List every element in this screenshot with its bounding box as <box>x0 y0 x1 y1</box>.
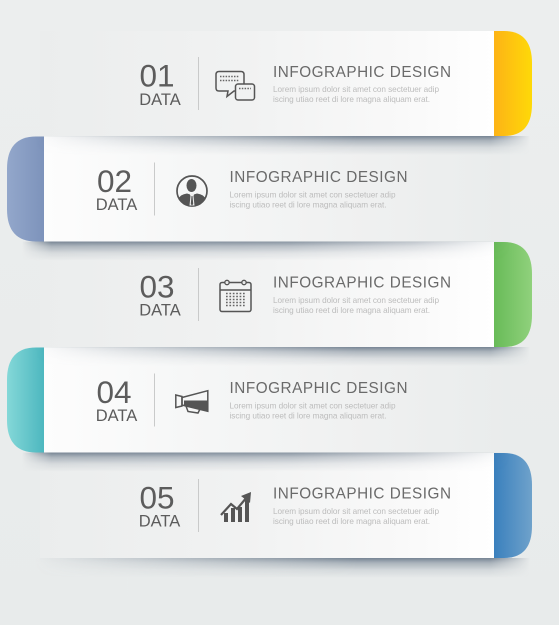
icon: speech bubbles <box>216 72 254 100</box>
icon: businessman <box>177 176 207 206</box>
text: heading and body: Lorem ipsum dolor sit amet con sectetuer adip <box>273 85 439 94</box>
number: 03: DATA <box>139 302 181 320</box>
number: 03: 03 <box>139 268 175 304</box>
number: 04 <box>96 374 137 425</box>
number: 04: DATA <box>96 407 137 425</box>
text: heading and body <box>273 486 451 526</box>
text: heading and body: iscing utiao reet di lore magna aliquam erat. <box>230 412 386 420</box>
text: heading and body: Lorem ipsum dolor sit amet con sectetuer adip <box>273 296 439 305</box>
panel: card 01 <box>35 31 532 155</box>
number: 01 <box>139 58 181 109</box>
number: 03 <box>139 268 181 320</box>
panel: card 04 <box>7 348 510 472</box>
text: heading and body <box>230 380 408 420</box>
tab: teal <box>7 348 44 452</box>
icon: megaphone <box>176 391 208 413</box>
text: heading and body: INFOGRAPHIC DESIGN <box>273 486 451 502</box>
tab: green <box>494 242 532 347</box>
tab: blue <box>494 453 532 558</box>
text: heading and body <box>273 64 451 104</box>
tab: periwinkle <box>7 136 44 242</box>
number: 05 <box>139 480 180 530</box>
icon: calendar <box>220 280 251 312</box>
text: heading and body: INFOGRAPHIC DESIGN <box>230 169 408 186</box>
number: 02: DATA <box>96 196 137 214</box>
text: heading and body <box>230 169 408 210</box>
text: heading and body: iscing utiao reet di lore magna aliquam erat. <box>273 306 430 315</box>
number: 01: 01 <box>139 58 175 94</box>
number: 05: 05 <box>139 480 175 516</box>
number: 01: DATA <box>139 91 181 109</box>
number: 02: 02 <box>97 163 132 199</box>
tab: yellow <box>494 31 532 136</box>
icon: growth chart <box>221 492 251 522</box>
panel: card 05 <box>35 453 532 578</box>
text: heading and body: iscing utiao reet di lore magna aliquam erat. <box>230 200 386 210</box>
text: heading and body: Lorem ipsum dolor sit amet con sectetuer adip <box>230 402 396 410</box>
number: 04: 04 <box>96 374 132 410</box>
text: heading and body: INFOGRAPHIC DESIGN <box>230 380 408 397</box>
text: heading and body: Lorem ipsum dolor sit amet con sectetuer adip <box>273 507 439 516</box>
number: 02 <box>96 163 137 214</box>
number: 05: DATA <box>139 512 180 530</box>
panel: card 02 <box>7 136 510 260</box>
text: heading and body: iscing utiao reet di lore magna aliquam erat. <box>273 517 430 526</box>
text: heading and body <box>273 274 451 315</box>
text: heading and body: INFOGRAPHIC DESIGN <box>273 64 451 81</box>
panel: card 03 <box>35 242 532 366</box>
text: heading and body: INFOGRAPHIC DESIGN <box>273 274 451 292</box>
text: heading and body: Lorem ipsum dolor sit amet con sectetuer adip <box>230 190 396 200</box>
text: heading and body: iscing utiao reet di lore magna aliquam erat. <box>273 95 430 104</box>
